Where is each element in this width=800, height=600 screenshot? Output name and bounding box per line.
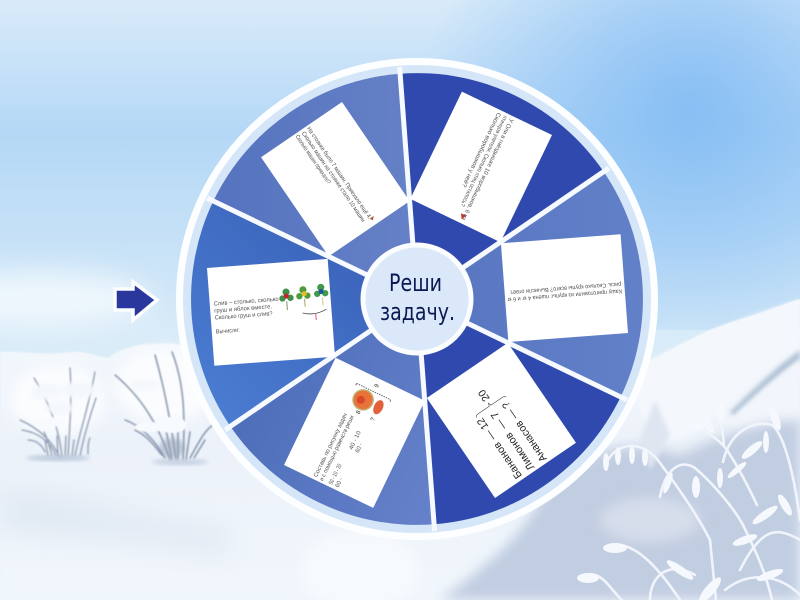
hub title [380,269,455,326]
hub [363,245,471,353]
sector: left [191,201,417,426]
card: bottom left, tomatoes: и с помощью равенств реши [319,415,356,482]
wheel [180,62,654,536]
icon: left snowy bush [10,364,106,461]
sector: top right [400,73,604,299]
icon: right snowy bush [115,347,215,465]
card: bottom right, fruit: 20 [476,387,493,404]
card: left, pears and plums: Вычисли: [216,328,240,336]
card: left, pears and plums: Слив – столько, сколько [214,297,279,308]
card: top left, cars: На стоянке было 7 машин. Приехало ещё 4. [305,126,372,221]
card: bottom left, tomatoes: 40 - 10 [349,430,363,451]
card: bottom left, tomatoes: 50 - 10 - 20 [329,463,344,486]
card: bottom left, tomatoes: 60 - [335,477,345,489]
card: right, task text [501,234,628,342]
card: top left, cars: Сколько машин приехало? [294,134,331,186]
card: bottom right, fruit: Ананасов [513,418,549,464]
sector: top left [213,74,417,299]
card: bottom right, fruit: — 12 [475,415,499,443]
card: top right, task text [410,92,552,242]
card: bottom right, fruit: Лимонов [503,430,537,472]
card: bottom right, fruit: — ? [500,399,521,422]
hub title: задачу. [380,298,455,326]
snow bank right [636,300,800,441]
card: left, pears and plums: груш и яблок вместе. [214,304,273,315]
sector: bottom left [230,299,434,525]
card: left, pears and plums: Сколько груш и слив? [215,311,274,322]
icon: tomatoes [345,375,395,424]
icon: frosted grass [577,402,800,600]
card: bottom left, tomatoes: Составь по рисунку задач [313,413,349,478]
card: top right, task text: птенцов улетели. Сколько птиц осталось? [458,114,507,207]
sector: right [417,172,643,397]
arrow [115,282,157,320]
outer ring [180,62,654,536]
icon: tomatoes: 8 [356,409,363,416]
card: top left, cars [261,102,410,256]
card: bottom left, tomatoes: 60 - [355,442,365,454]
card: bottom right, fruit: — 7 [489,409,509,432]
sector: bottom right [417,299,621,524]
icon: trees [278,283,330,323]
card: right, task text: Кашу приготовили из крупы: пшена 4 кг и 6 кг [506,287,622,302]
card: bottom right, fruit: Бананов [491,439,525,481]
hub title: Реши [389,269,442,297]
icon: tomatoes: 9 [374,383,381,389]
icon: tomatoes: ? [370,416,377,422]
card: top right, task text: Сколько воробышков у неё? [460,111,501,188]
spokes [207,67,627,531]
card: top right, task text: У Оли в гнёздышке 10 воробышков, 6 из [460,117,514,221]
card: bottom left, tomatoes [284,358,425,508]
card: bottom right, fruit [427,343,576,498]
card: top left, cars: Сколько машин на стоянке стало 10 машин [300,131,366,224]
card: left, pears and plums [207,259,335,366]
card: right, task text: риса. Сколько крупы всего? Вычисли ответ. [509,280,621,295]
